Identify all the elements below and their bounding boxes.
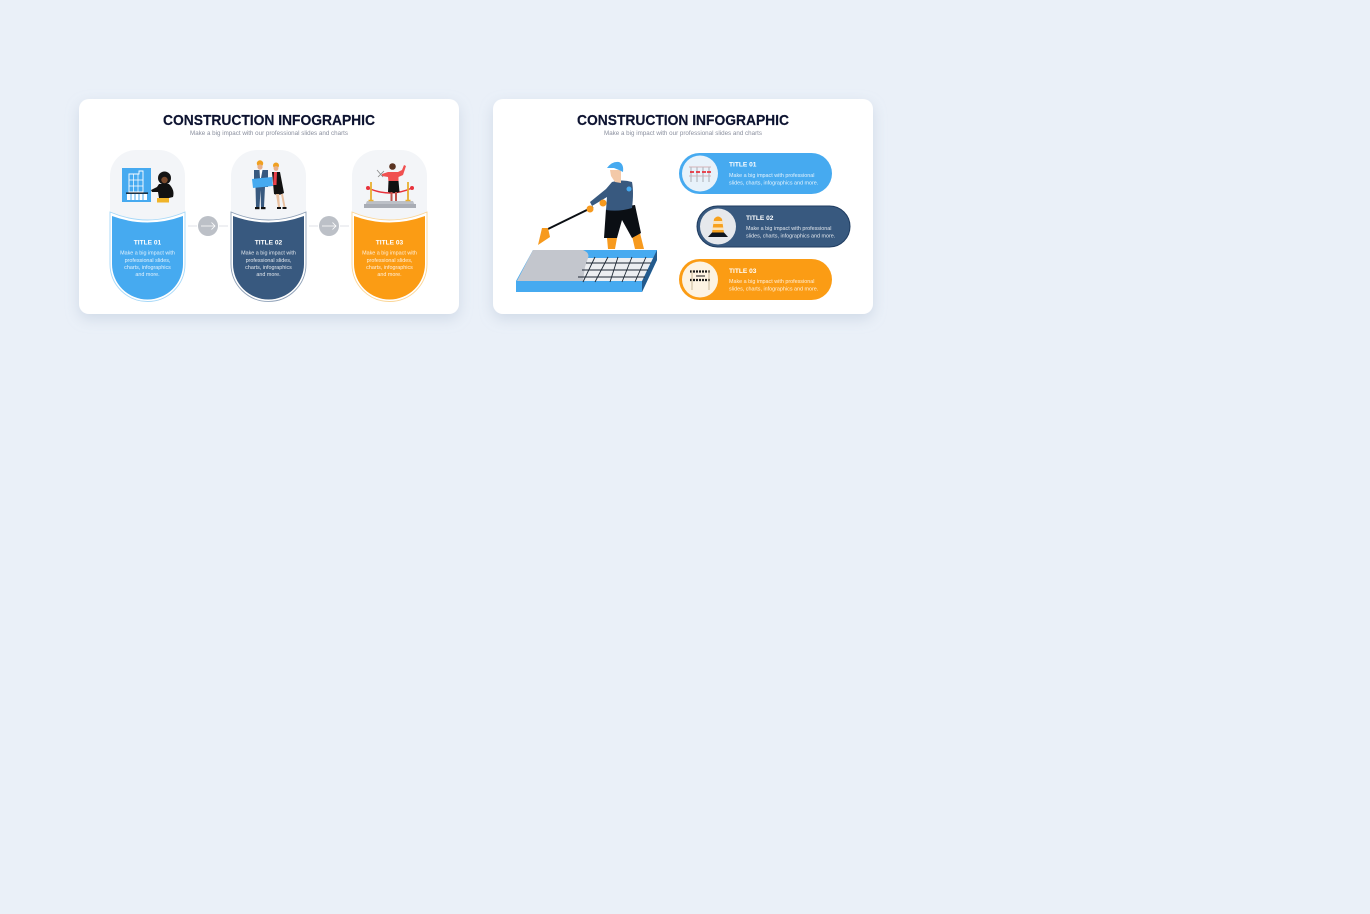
column 2 text: charts, infographics xyxy=(245,265,292,271)
column 2 text: Make a big impact with xyxy=(241,250,296,256)
column 1 text: charts, infographics xyxy=(124,265,171,271)
column 3 text: charts, infographics xyxy=(366,265,413,271)
column 2 title: TITLE 02 xyxy=(255,240,283,246)
heading: right title: CONSTRUCTION INFOGRAPHIC xyxy=(577,112,789,129)
column 1 text: Make a big impact with xyxy=(120,250,175,256)
list item 2 xyxy=(697,206,850,247)
item 2 text: slides, charts, infographics and more. xyxy=(746,233,835,239)
torso xyxy=(590,180,633,211)
icon: two engineers with blueprint xyxy=(252,160,286,209)
subtitle: right: Make a big impact with our professional slides and charts xyxy=(604,130,763,137)
column 3 text: and more. xyxy=(377,272,402,278)
column 2 white bowl with outline xyxy=(231,212,306,301)
legs xyxy=(607,233,644,249)
connector: dashes and arrow 1 xyxy=(188,216,228,236)
column 3 xyxy=(352,150,427,302)
item 1 text: slides, charts, infographics and more. xyxy=(729,180,818,186)
item 1 icon: barrier xyxy=(682,156,718,192)
item 2 pill xyxy=(697,206,850,247)
item 1 title: TITLE 01 xyxy=(729,162,757,168)
heading: left title: CONSTRUCTION INFOGRAPHIC xyxy=(163,112,375,129)
column 1 white bowl with outline xyxy=(110,212,185,302)
column 1 top panel xyxy=(110,150,185,222)
column 1 text: professional slides, xyxy=(125,258,171,264)
column 1 title: TITLE 01 xyxy=(134,240,162,246)
item 2 title: TITLE 02 xyxy=(746,215,774,222)
illustration: worker spreading concrete xyxy=(516,162,657,292)
column 3 white bowl with outline xyxy=(352,212,427,302)
column 1 coloured bowl xyxy=(112,216,183,300)
column 3 top panel xyxy=(352,150,427,222)
icon: ribbon cutting xyxy=(364,163,416,208)
panel: right card xyxy=(493,99,873,314)
slab xyxy=(516,250,657,292)
column 2 text: professional slides, xyxy=(246,258,292,264)
tool xyxy=(548,207,593,229)
connector: dashes and arrow 2 xyxy=(309,216,349,236)
item 2 text: Make a big impact with professional xyxy=(746,226,831,232)
column 2 top panel xyxy=(231,150,306,222)
item 3 icon: road barricade xyxy=(682,262,718,298)
list item 3 xyxy=(679,259,832,300)
column 2 coloured bowl xyxy=(233,216,304,300)
item 2 icon: cone xyxy=(700,208,736,244)
item 3 title: TITLE 03 xyxy=(729,268,757,275)
head xyxy=(610,170,621,183)
column 3 text: Make a big impact with xyxy=(362,250,417,256)
column 2 text: and more. xyxy=(256,272,281,278)
item 1 pill xyxy=(679,153,832,194)
column 1 xyxy=(110,150,185,302)
item 3 pill xyxy=(679,259,832,300)
column 3 title: TITLE 03 xyxy=(376,240,404,246)
item 3 text: slides, charts, infographics and more. xyxy=(729,286,818,292)
subtitle: left: Make a big impact with our professional slides and charts xyxy=(190,130,349,137)
column 2 xyxy=(231,150,306,301)
list item 1 xyxy=(679,153,832,194)
column 3 coloured bowl xyxy=(354,216,425,300)
panel: left card xyxy=(79,99,459,314)
item 1 text: Make a big impact with professional xyxy=(729,173,814,179)
item 3 text: Make a big impact with professional xyxy=(729,279,814,285)
column 3 text: professional slides, xyxy=(367,258,413,264)
icon: building and presenter xyxy=(122,168,174,202)
column 1 text: and more. xyxy=(135,272,160,278)
